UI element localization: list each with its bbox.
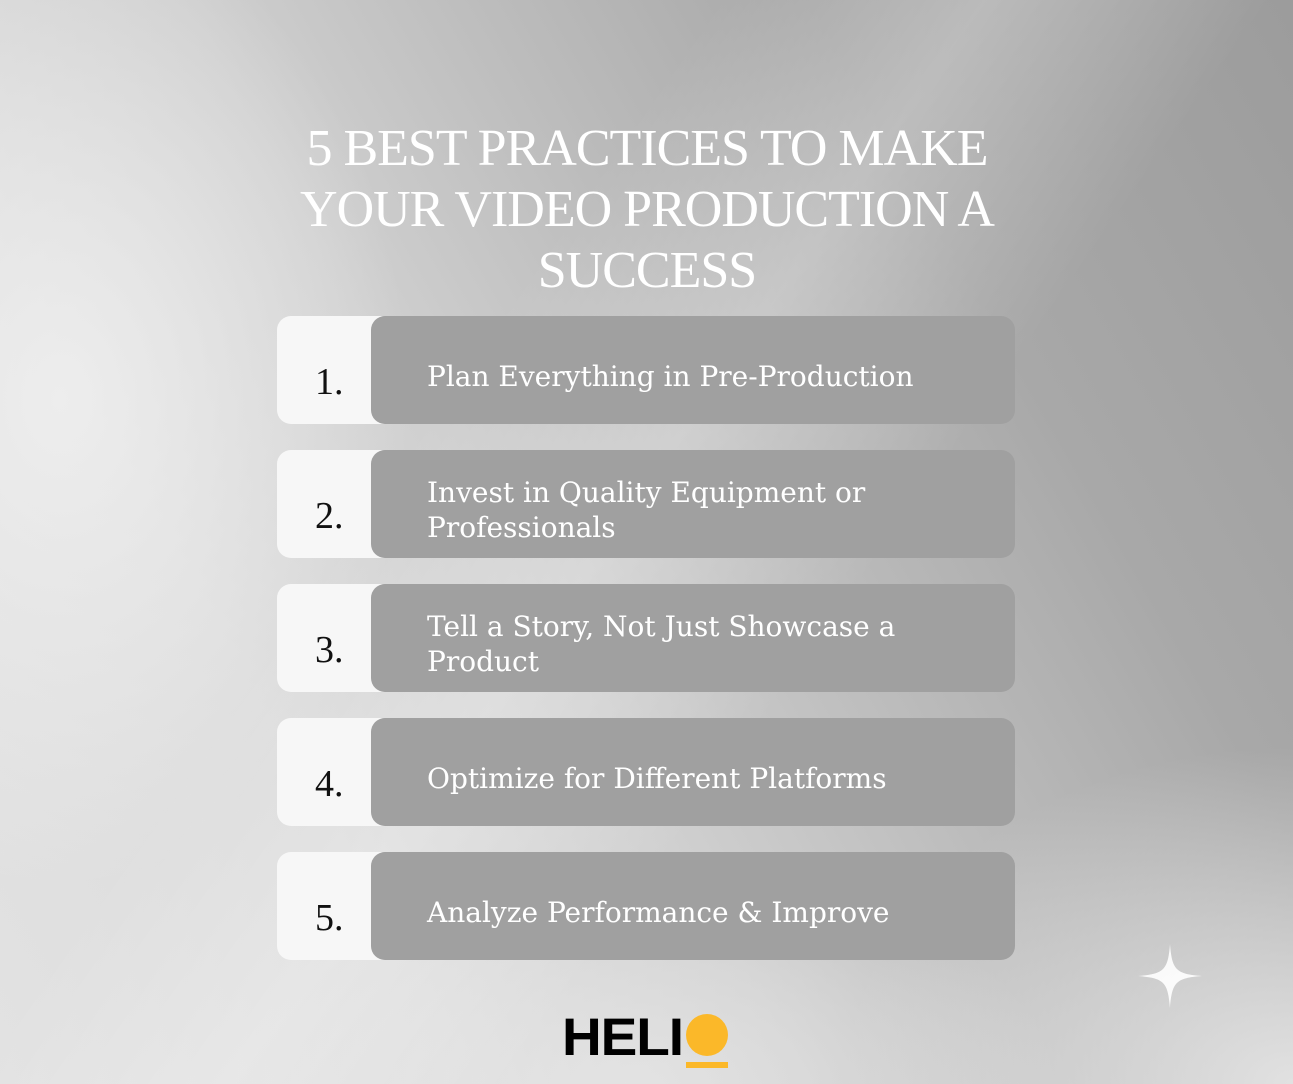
card 3 [277,584,1015,692]
card 2: 2. [315,495,344,537]
card 3: Tell a Story, Not Just Showcase a Product [427,610,895,678]
card 3: 3. [315,629,344,671]
title: 5 BEST PRACTICES TO MAKE YOUR VIDEO PRODUCTION A SUCCESS [300,120,994,299]
card 2 [277,450,1015,558]
card 5 [277,852,1015,960]
logo: HELI [562,1008,683,1066]
card 4 [277,718,1015,826]
card 4: Optimize for Different Platforms [427,762,887,794]
card 2: Invest in Quality Equipment or Professionals [427,476,865,544]
card 1 [277,316,1015,424]
card 1: 1. [315,361,344,403]
card 4: 4. [315,763,344,805]
card 1: Plan Everything in Pre-Production [427,360,914,392]
icon: sparkle [1139,945,1201,1008]
card 5: Analyze Performance & Improve [427,896,890,928]
card 5: 5. [315,897,344,939]
